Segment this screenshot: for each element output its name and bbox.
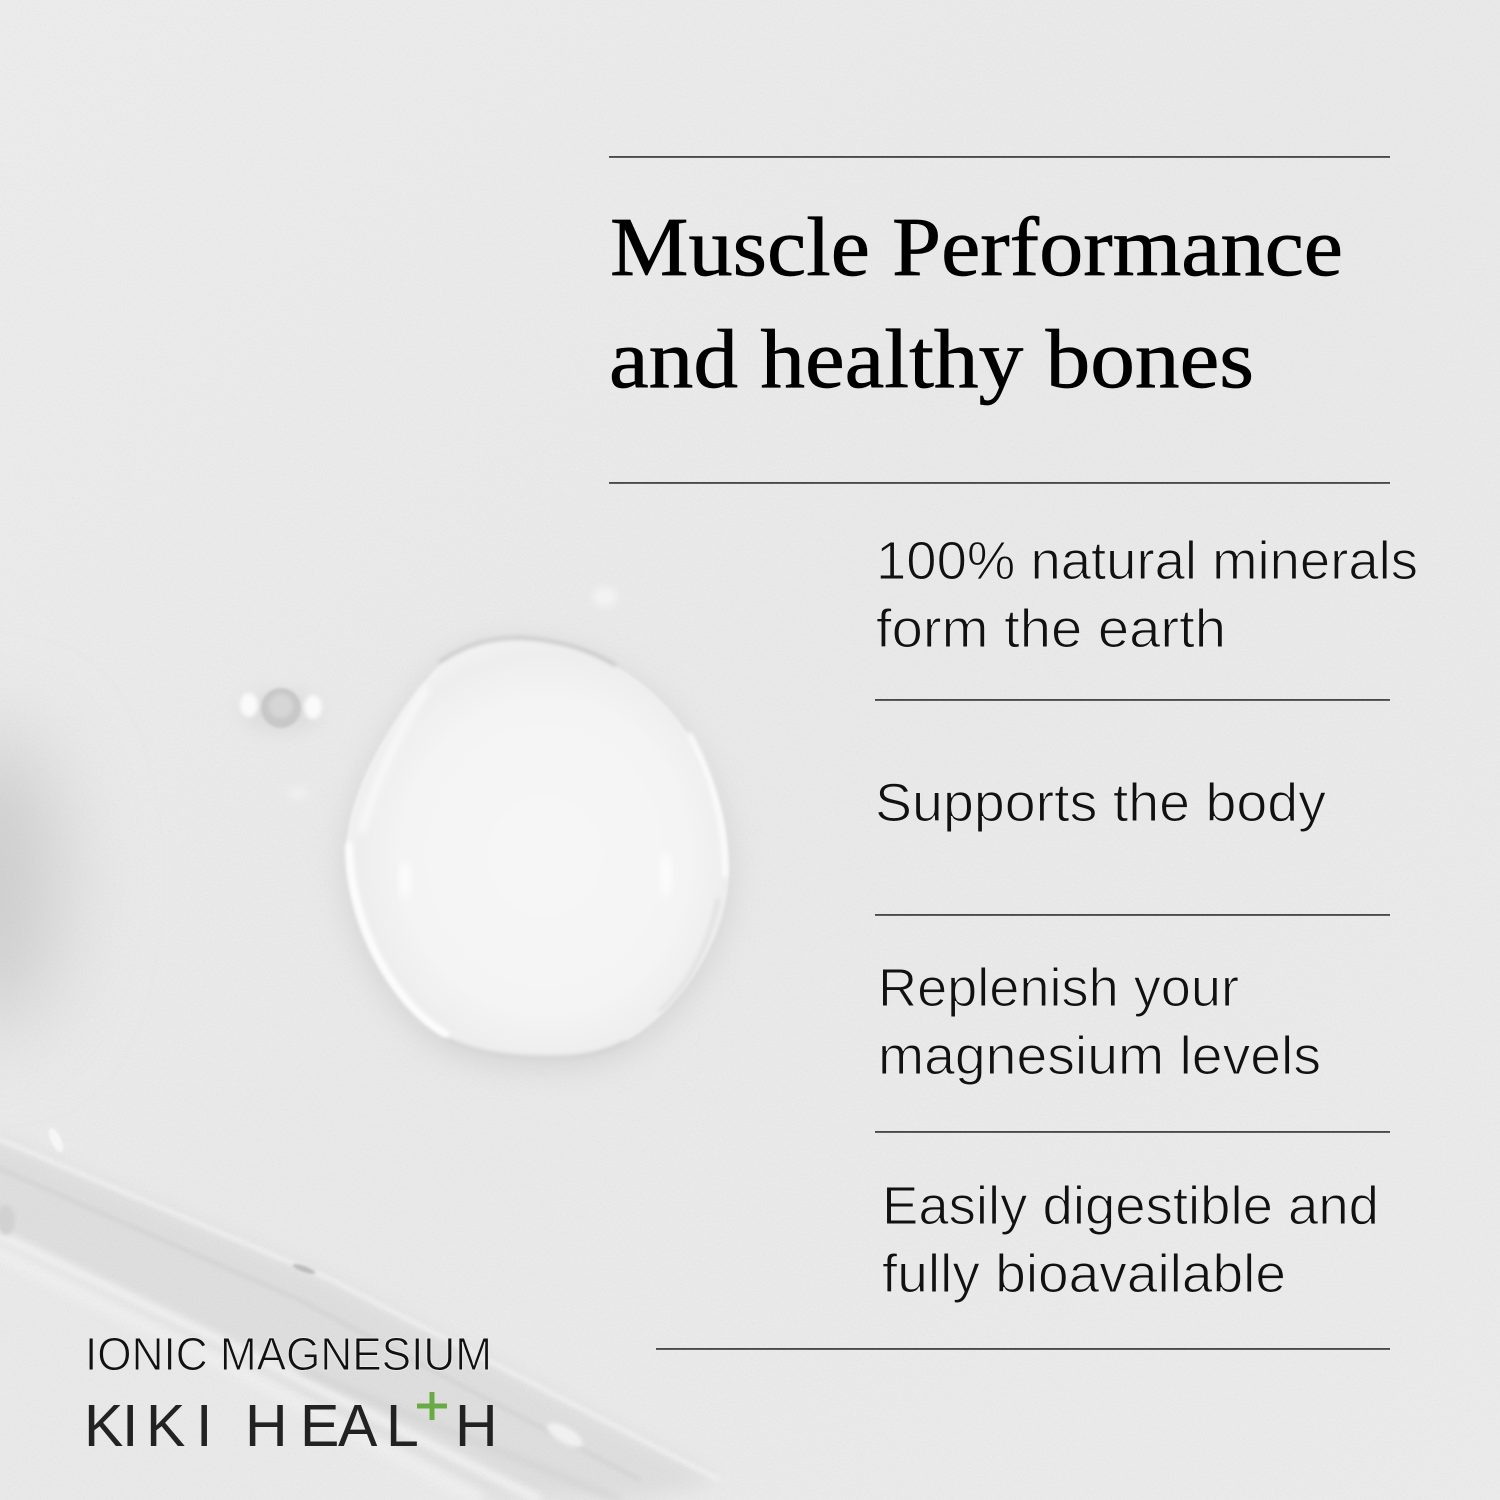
benefit: digestible and bioavailable: [882, 1176, 1379, 1304]
divider: after benefit four: [656, 1348, 1390, 1350]
logo: Kiki Health: KIKIHEALH: [84, 1393, 498, 1459]
benefit: replenish magnesium: [878, 958, 1321, 1086]
product name: IONIC MAGNESIUM: [85, 1328, 492, 1380]
benefit: supports the body: Supports the body: [875, 773, 1326, 833]
title: [609, 201, 1343, 406]
benefit: digestible and bioavailable: fully bioavailable: [882, 1244, 1286, 1304]
benefit: natural minerals: form the earth: [876, 599, 1226, 659]
divider: above title: [609, 156, 1390, 158]
icon: green plus in logo: [417, 1392, 447, 1420]
divider: below title: [609, 482, 1390, 484]
benefit: natural minerals: 100% natural minerals: [876, 531, 1418, 591]
divider: after benefit one: [875, 699, 1390, 701]
benefit: digestible and bioavailable: Easily digestible and: [882, 1176, 1379, 1236]
benefit: replenish magnesium: Replenish your: [878, 958, 1239, 1018]
icon: small water droplet: [240, 587, 617, 799]
benefit: natural minerals: [876, 531, 1418, 659]
divider: after benefit three: [875, 1131, 1390, 1133]
title: and healthy bones: [609, 313, 1254, 406]
title: Muscle Performance: [610, 201, 1343, 294]
icon: large clear water drop: [343, 638, 730, 1068]
benefit: replenish magnesium: magnesium levels: [878, 1026, 1321, 1086]
divider: after benefit two: [875, 914, 1390, 916]
